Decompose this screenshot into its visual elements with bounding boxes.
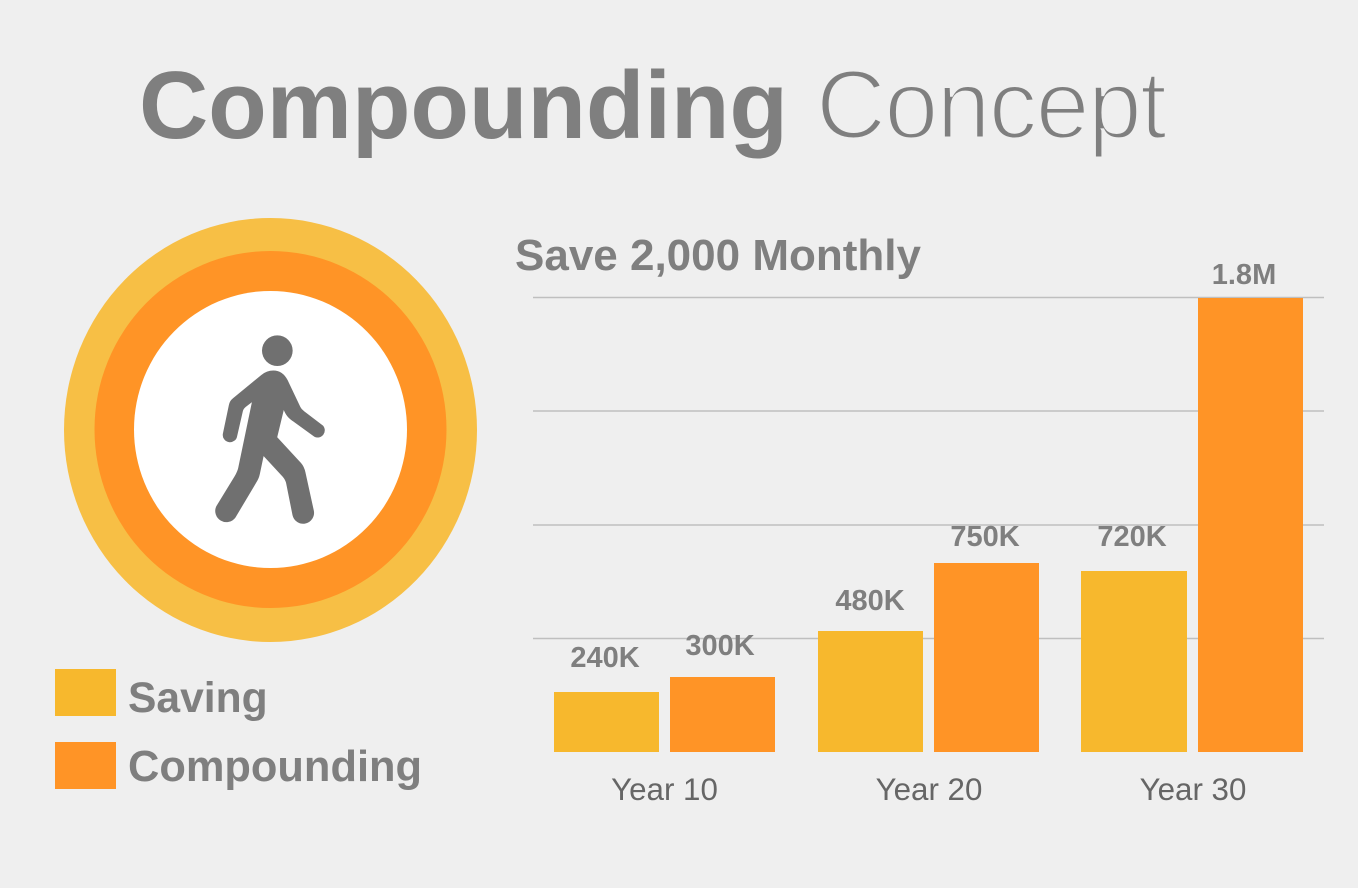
legend item: saving [55, 669, 268, 722]
group: year 30: 1.8M [1212, 259, 1276, 291]
legend item: saving: Saving [128, 674, 268, 722]
group: year 10: 300K [685, 630, 755, 662]
panel: walking figure target [64, 218, 477, 642]
group: year 30: 720K [1097, 521, 1167, 553]
group: year 30 [1081, 259, 1303, 807]
title: Compounding [139, 52, 788, 159]
chart heading: Save 2,000 Monthly [515, 231, 921, 280]
icon: walking person [216, 335, 324, 523]
title: Concept [816, 50, 1167, 159]
group: year 10: Year 10 [611, 772, 718, 807]
title [139, 50, 1167, 159]
group: year 20: 750K [950, 521, 1020, 553]
legend item: compounding: Compounding [128, 743, 422, 791]
group: year 20: 480K [835, 585, 905, 617]
legend [55, 669, 422, 791]
group: year 20 [818, 521, 1039, 807]
group: year 20: Year 20 [876, 772, 982, 807]
group: year 10: 240K [570, 642, 640, 674]
group: year 10 [554, 630, 775, 807]
bar chart [533, 259, 1324, 807]
group: year 30: Year 30 [1140, 772, 1246, 807]
